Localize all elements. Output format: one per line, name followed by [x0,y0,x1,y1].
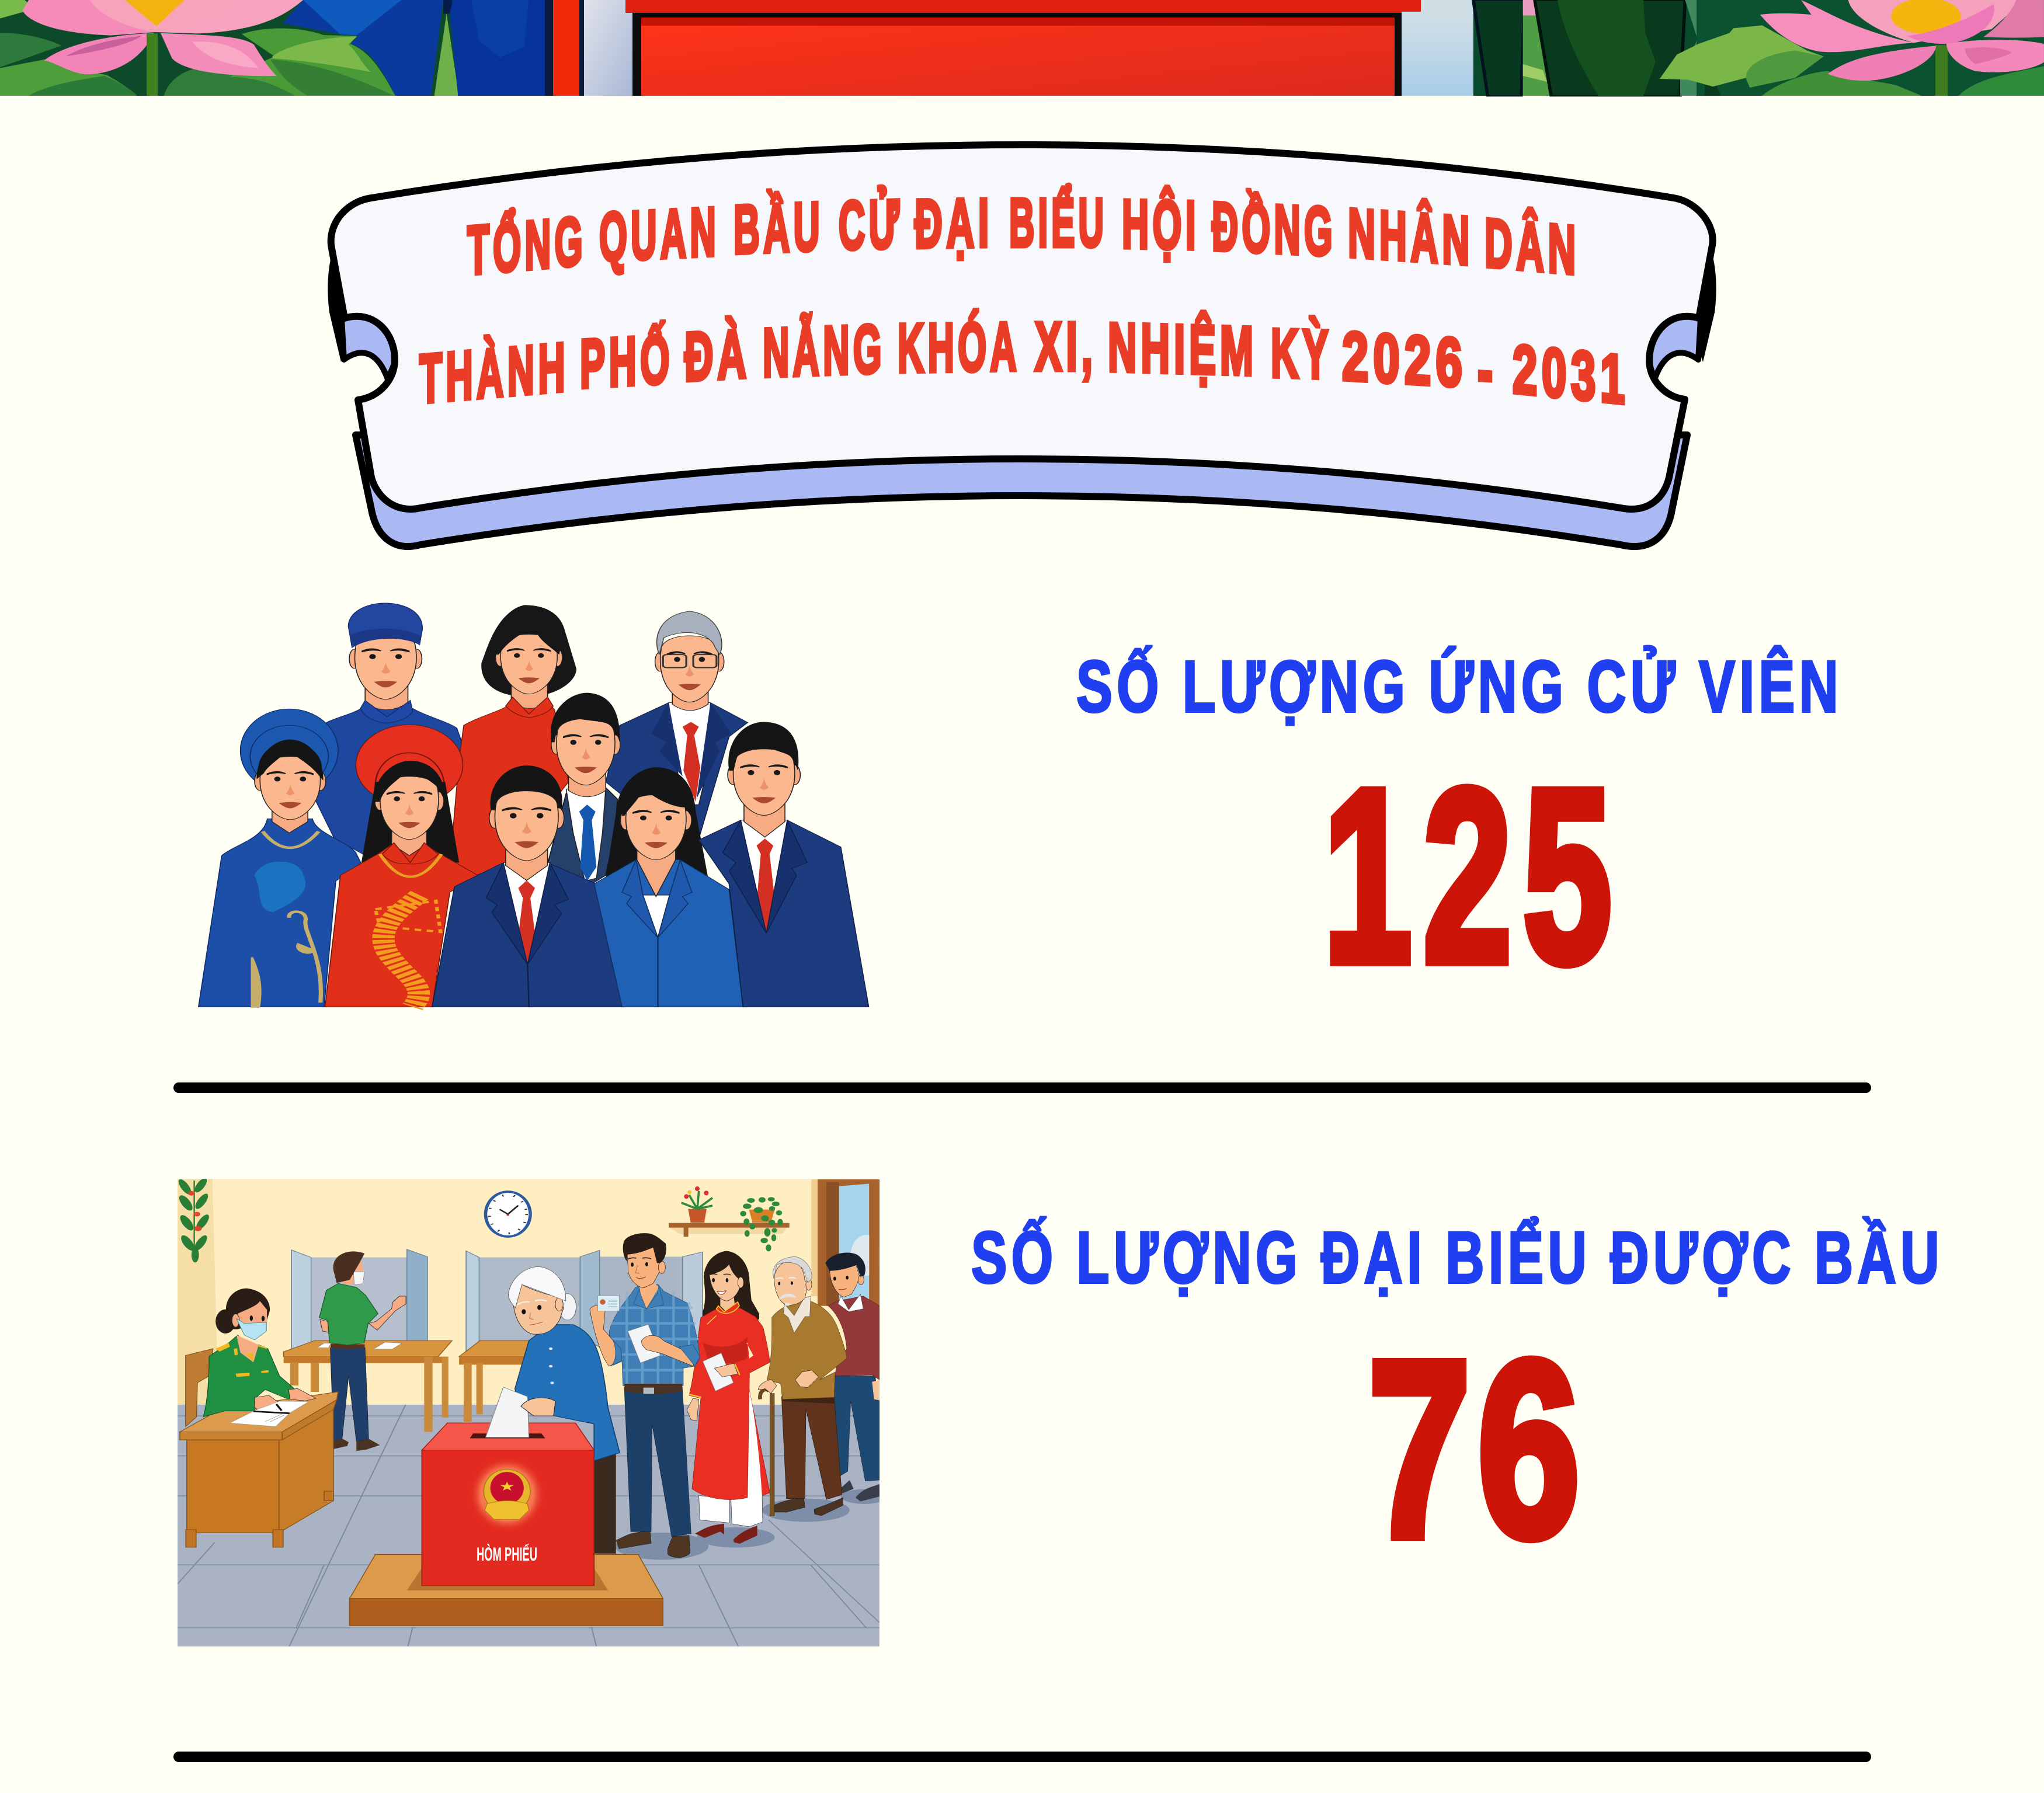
hanging vine decoration [179,1179,209,1262]
title line 1: HỘI [1122,185,1200,264]
candidate: man with turban in blue ao dai [315,603,463,858]
right lotus and leaves [1473,0,2044,96]
candidate: man in navy suit at right [699,722,869,1007]
right voting booths and table [459,1251,703,1422]
title line 2: 2026 [1342,318,1467,402]
title line 1: BẦU [734,187,823,269]
voter: man with plaid shirt holding ID card [590,1233,708,1560]
title line 2: PHỐ [580,320,673,403]
title line 2: XI, [1035,308,1097,385]
divider line 2 [173,1752,1871,1762]
title line 1: QUAN [599,193,719,276]
ballot box on banner [625,0,1421,96]
title line 2: ĐÀ [684,315,750,396]
ribbon face [331,145,1713,509]
left ear [328,257,1716,362]
candidate: woman in red ao dai and headdress [325,725,478,1007]
number: 76 elected delegates: 76 [1368,1309,1587,1589]
title line 2: THÀNH [419,329,569,418]
left figure trousers [283,0,555,96]
illustration: group of nine candidates [199,603,869,1007]
election officer in green uniform with mask [186,1289,316,1426]
title line 1: DÂN [1485,204,1580,290]
candidate: woman in blue ao dai and headdress [199,709,361,1007]
voter: woman in red ao dai [687,1251,775,1548]
title line 1: BIỂU [1009,184,1107,262]
title line 1: ĐỒNG [1212,187,1336,271]
door and wall shelf with plants [669,1179,882,1306]
wall clock [486,1192,530,1237]
title line 2: 2031 [1513,330,1629,419]
title line 2: NHIỆM [1108,308,1257,390]
title line 2: KHÓA [898,308,1020,387]
national emblem on ballot box [469,1457,545,1532]
title line 1 [467,184,1580,290]
title line 2 [419,308,1629,419]
candidate: man in navy suit at front [432,765,624,1007]
voter: elderly man with cane [758,1257,850,1522]
title line 2: NẴNG [763,310,885,392]
room background with wall, floor, booths [176,1177,880,1646]
title line 1: NHÂN [1348,194,1473,280]
title line 1: TỔNG [467,202,586,290]
right background sky strip [1402,12,1487,96]
voter: young man in maroon sweater [825,1253,880,1504]
red and grey strips [545,0,553,96]
ribbon back fold [356,435,1687,546]
ballot box [422,1387,594,1586]
candidate: man in dark suit with blue tie [548,693,620,884]
title line 2: - [1478,332,1497,410]
title line 2: KỲ [1271,315,1332,394]
divider line 1 [173,1082,1871,1093]
ballot box label: HÒM PHIẾU [477,1544,537,1565]
left lotus and leaves [0,0,451,96]
voter in green shirt at booth [319,1251,406,1451]
elderly woman casting ballot [508,1266,620,1554]
title banner ribbon [328,145,1716,546]
candidate: woman in blue blazer [594,767,743,1007]
officer desk with papers [180,1392,338,1547]
title line 1: ĐẠI [915,184,993,263]
candidate: woman with bob hair in red ao dai [450,605,576,875]
number: 125 candidates: 125 [1323,739,1623,1014]
right ear [1648,315,1701,380]
illustration: voting station scene [176,1177,888,1646]
candidate: older man with grey hair and glasses [606,611,748,838]
national emblem on ballot box: ★ [499,1479,515,1494]
left voting booth and table [284,1249,452,1432]
voting stand [350,1555,663,1625]
title text [419,184,1629,419]
top banner illustration: lotus flowers and voters at ballot box [0,0,2044,96]
title line 1: CỬ [839,185,903,264]
